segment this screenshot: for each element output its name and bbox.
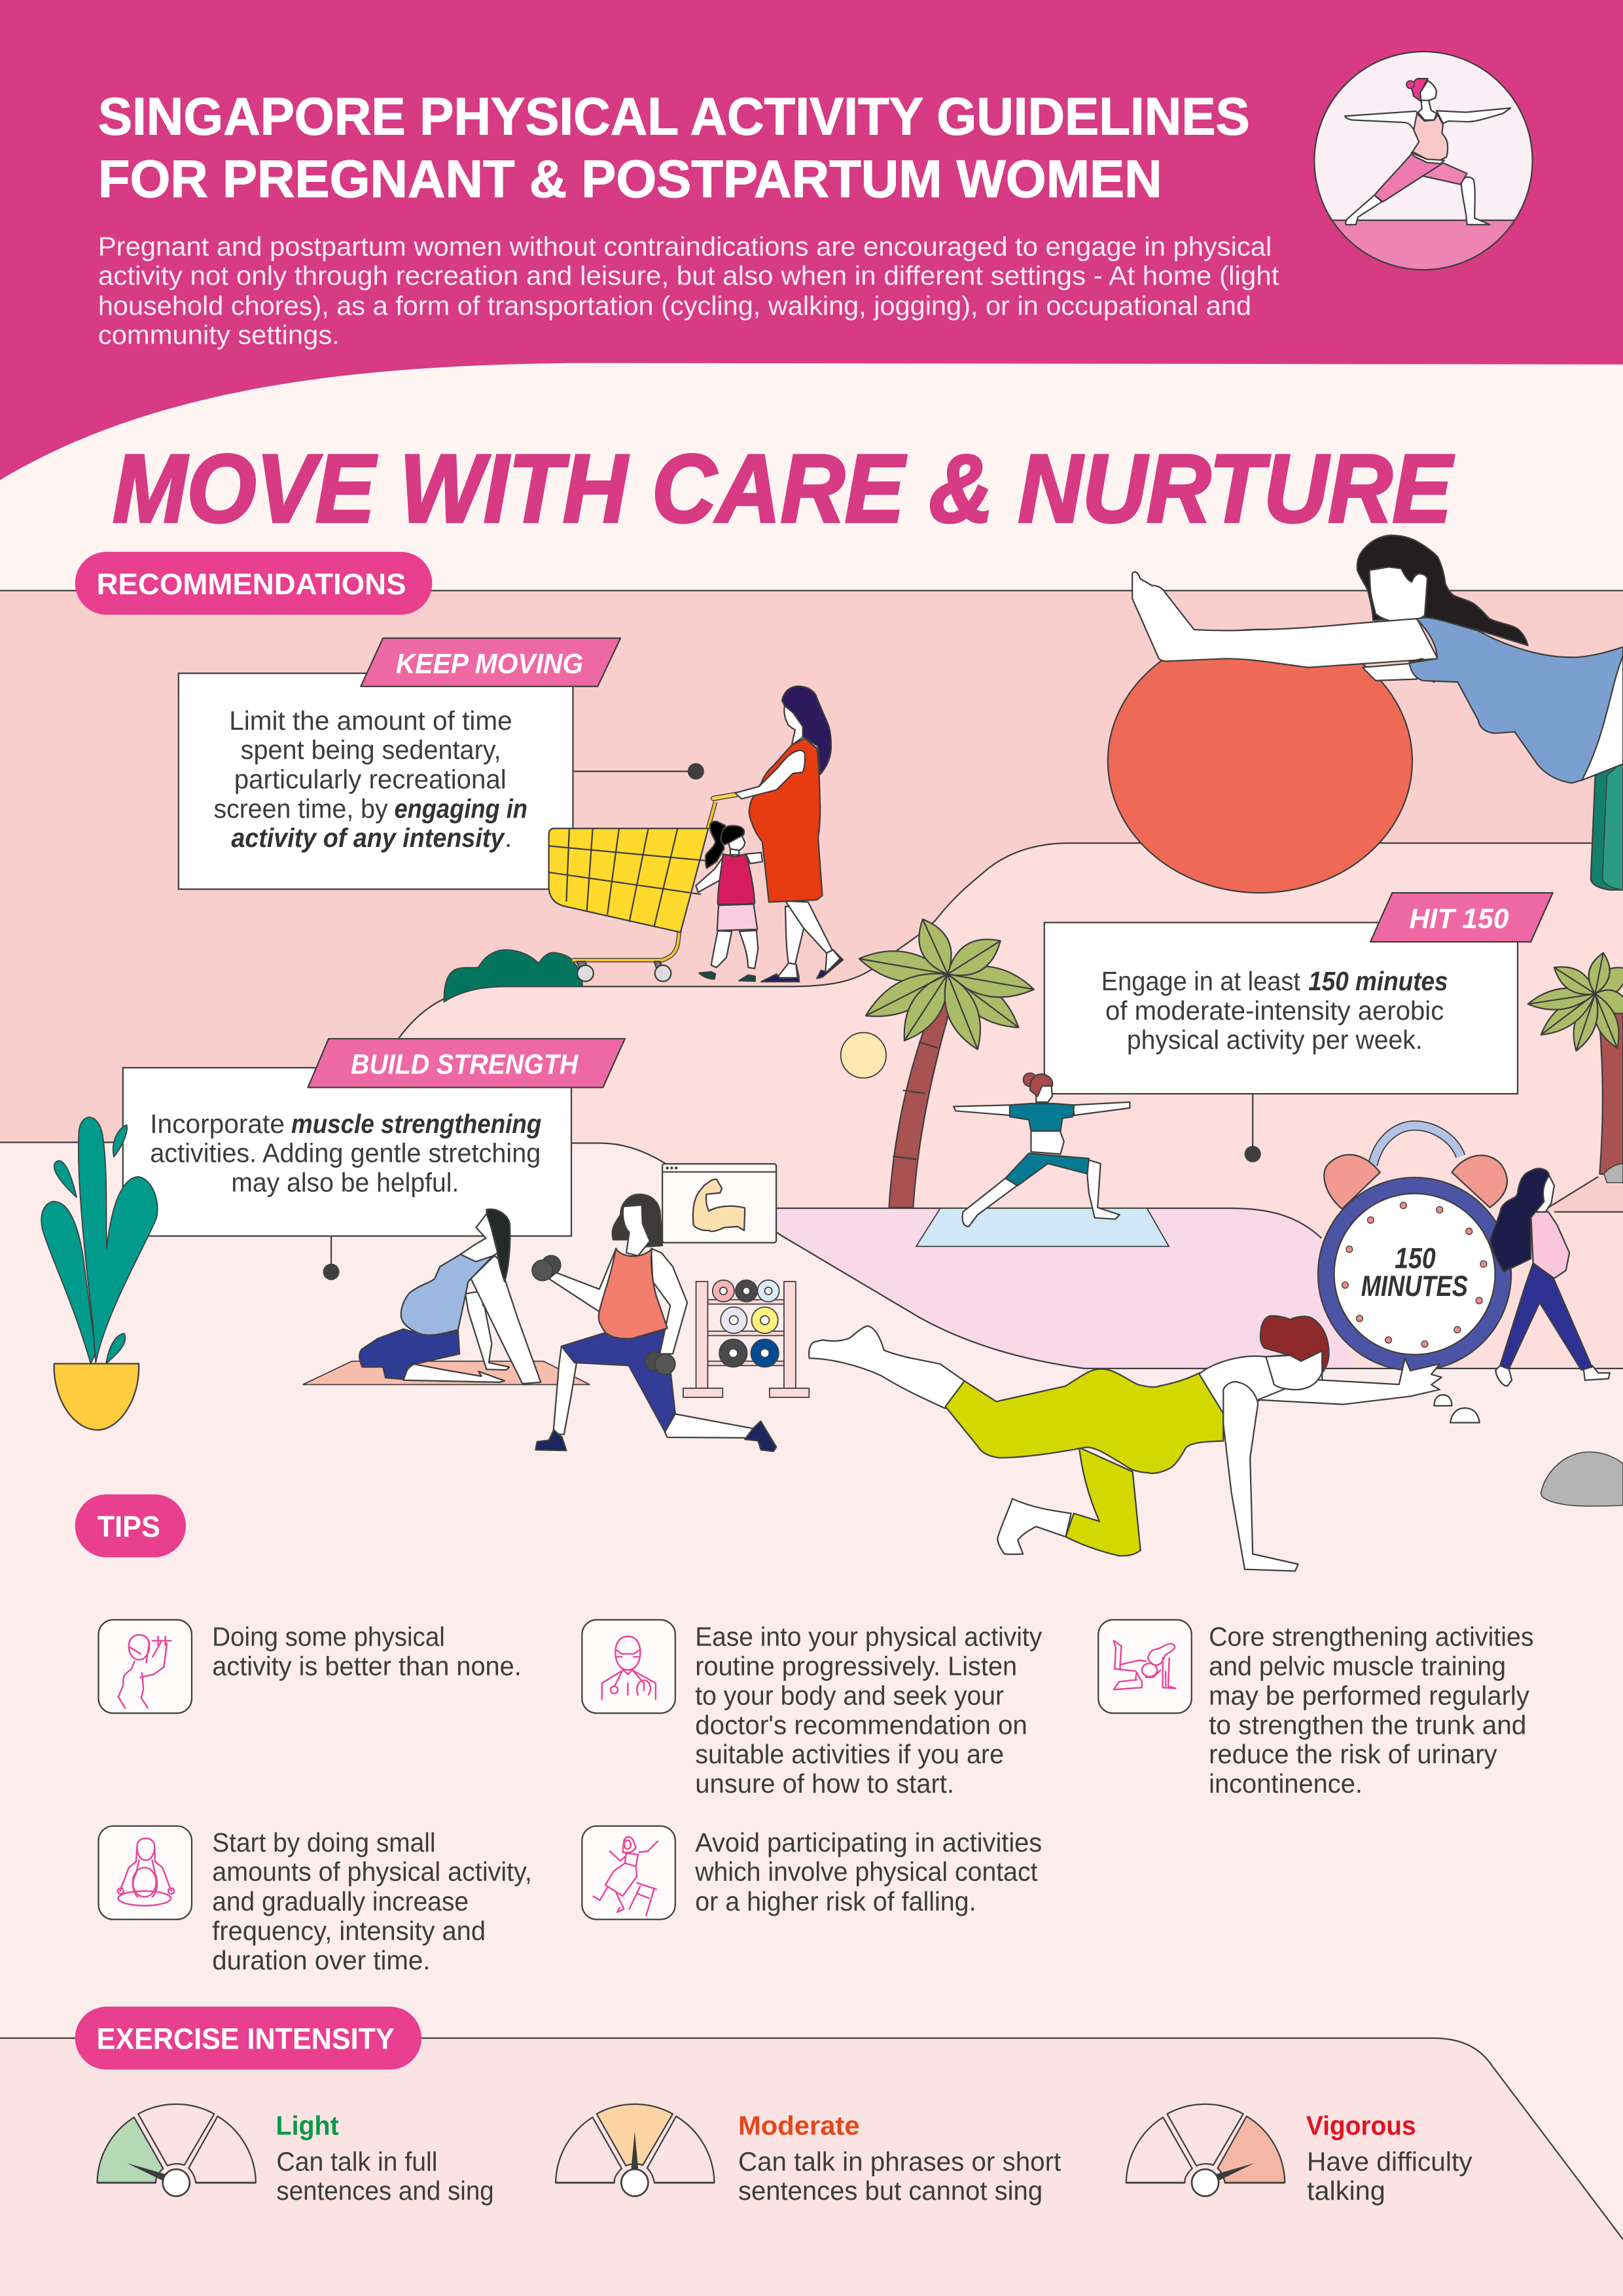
text: some activity: activity is better than none. [212,1651,522,1681]
intro paragraph: community settings. [98,320,340,350]
tip: core strengthening [1098,1620,1534,1799]
text: light: sentences and sing [276,2176,494,2206]
text: core strengthening: reduce the risk of urinary [1209,1739,1497,1769]
text: start small: and gradually increase [212,1886,469,1916]
tip: start small [99,1826,532,1975]
tag: hit 150: HIT 150 [1410,904,1509,935]
illustration: woman in warrior pose [954,1073,1130,1227]
text: start small: Start by doing small [212,1827,436,1857]
illustration: exercise ball [1108,630,1412,893]
tag: keep moving [361,638,620,687]
text: keep moving [213,706,527,853]
text: some activity [212,1621,522,1681]
heading: move with care and nurture: MOVE WITH CARE & NURTURE [113,435,1455,543]
text: moderate: sentences but cannot sing [738,2176,1043,2206]
illustration: yoga mat [916,1208,1169,1246]
intensity: moderate [556,2104,1061,2206]
illustration: woman leaning on exercise ball [1132,535,1623,890]
illustration: small stones [1435,1395,1480,1423]
text: start small [212,1827,532,1975]
text: build strength: muscle strengthening [291,1109,542,1139]
text: hit 150: physical activity per week. [1127,1025,1423,1055]
icon: woman lifting dumbbell [99,1620,192,1713]
text: avoid risk: which involve physical contact [694,1857,1038,1887]
clock text: MINUTES [1361,1270,1468,1302]
illustration: flexed arm window [662,1164,776,1243]
text: keep moving: Limit the amount of time [229,706,512,736]
panel: build strength card [123,1039,625,1280]
text: keep moving: engaging in [394,793,527,823]
heading pill: tips [75,1494,186,1557]
text: progress gradually: to your body and seek your [695,1680,1004,1710]
tag: build strength: BUILD STRENGTH [351,1050,579,1081]
text: avoid risk [694,1827,1042,1916]
text: progress gradually: suitable activities if you are [695,1739,1004,1769]
illustration: alarm clock [1318,1126,1511,1371]
text: keep moving: . [505,823,512,853]
illustration: right palm tree [1528,953,1623,1183]
text: progress gradually: doctor's recommendation on [695,1710,1027,1740]
text: core strengthening: may be performed regularly [1209,1680,1530,1710]
text: keep moving: spent being sedentary, [241,735,501,765]
text: build strength [150,1109,542,1197]
text: hit 150: Engage in at least [1101,966,1300,996]
illustration: rock [1541,1452,1623,1506]
illustration: woman doing lunge with dumbbells [532,1194,776,1451]
illustration: dumbbell rack [683,1280,809,1397]
intensity: vigorous [1126,2104,1472,2206]
tip: avoid risk [582,1826,1042,1920]
connector: keep moving [573,763,704,780]
header band [0,0,1623,480]
text: build strength: may also be helpful. [231,1167,459,1197]
icon: doctor [582,1620,675,1713]
text: moderate: Moderate [738,2110,860,2140]
illustration: sun [841,1033,886,1078]
text: hit 150: of moderate-intensity aerobic [1105,996,1444,1026]
intro paragraph [98,231,1279,350]
gauge: moderate [556,2104,715,2196]
illustration: exercise mat [303,1361,590,1384]
tip: some activity [99,1620,522,1713]
intro paragraph: Pregnant and postpartum women without contraindications are encouraged to engage in physical [98,231,1272,261]
text: start small: frequency, intensity and [212,1916,486,1946]
icon: header yoga circle [1314,52,1533,270]
text: start small: duration over time. [212,1945,430,1975]
panel: keep moving card [179,638,704,889]
text: keep moving: particularly recreational [234,764,507,794]
text: some activity: Doing some physical [212,1621,445,1651]
panel: hit 150 card [1044,893,1553,1162]
icon: woman in bird dog pose [1098,1620,1192,1713]
text: keep moving: screen time, by [213,793,388,823]
text: core strengthening: Core strengthening activities [1209,1621,1534,1651]
tip: progress gradually [582,1620,1043,1799]
heading pill: exercise intensity: EXERCISE INTENSITY [97,2022,395,2056]
text: keep moving: activity of any intensity [231,823,506,853]
text: vigorous: Vigorous [1306,2110,1416,2140]
text: avoid risk: or a higher risk of falling. [695,1886,976,1916]
text: core strengthening: and pelvic muscle training [1209,1651,1506,1681]
intensity: light [97,2104,494,2206]
intro paragraph: activity not only through recreation and leisure, but also when in different settings - At home (light [98,260,1279,291]
text: vigorous: Have difficulty [1307,2146,1472,2176]
title [98,88,1250,209]
illustration: potted plant [41,1117,158,1430]
icon: woman falling over chair [582,1826,675,1920]
heading pill: recommendations: RECOMMENDATIONS [97,567,406,601]
connector: build strength [323,1236,340,1280]
tag: hit 150 [1370,893,1553,942]
text: core strengthening: incontinence. [1209,1768,1363,1799]
recommendations scenery background [0,590,1623,2296]
connector: hit 150 [1245,1093,1261,1162]
title: FOR PREGNANT & POSTPARTUM WOMEN [98,150,1162,209]
text: core strengthening: to strengthen the trunk and [1209,1710,1526,1740]
text: vigorous [1306,2110,1472,2206]
text: hit 150: 150 minutes [1308,966,1448,996]
clock text [1361,1243,1468,1302]
illustration: bush [444,950,582,1002]
illustration: woman in bird dog pose [809,1316,1442,1571]
exercise intensity background [0,2038,1623,2296]
clock text: 150 [1395,1243,1436,1275]
illustration: woman stretching on mat [359,1210,541,1384]
icon: meditating woman [99,1826,192,1920]
gauge: vigorous [1126,2104,1285,2196]
text: build strength: activities. Adding gentle stretching [150,1138,541,1168]
text: light: Light [276,2110,339,2140]
text: progress gradually: routine progressively. Listen [695,1651,1017,1681]
text: avoid risk: Avoid participating in activities [695,1827,1042,1857]
text: start small: amounts of physical activity, [212,1857,532,1887]
text: hit 150 [1101,966,1448,1055]
title: SINGAPORE PHYSICAL ACTIVITY GUIDELINES [98,88,1250,147]
text: light [276,2110,494,2206]
heading pill: recommendations [75,552,432,615]
heading pill: exercise intensity [75,2007,421,2070]
text: progress gradually: Ease into your physical activity [695,1621,1043,1651]
tag: build strength [308,1039,625,1088]
text: vigorous: talking [1307,2176,1385,2206]
intro paragraph: household chores), as a form of transportation (cycling, walking, jogging), or in occupational and [98,291,1251,321]
text: build strength: Incorporate [150,1109,285,1139]
text: moderate: Can talk in phrases or short [738,2146,1061,2176]
text: light: Can talk in full [276,2146,437,2176]
tag: keep moving: KEEP MOVING [396,649,583,680]
text: progress gradually: unsure of how to start. [695,1768,954,1799]
illustration: woman with shopping cart and child [696,686,843,982]
gauge: light [97,2104,256,2196]
illustration: left palm tree [859,919,1034,1208]
text: core strengthening [1209,1621,1534,1799]
heading pill: tips: TIPS [98,1510,160,1543]
text: progress gradually [695,1621,1043,1799]
illustration: walking pregnant woman [1490,1168,1610,1386]
text: moderate [738,2110,1061,2206]
illustration: shopping cart [549,794,738,981]
